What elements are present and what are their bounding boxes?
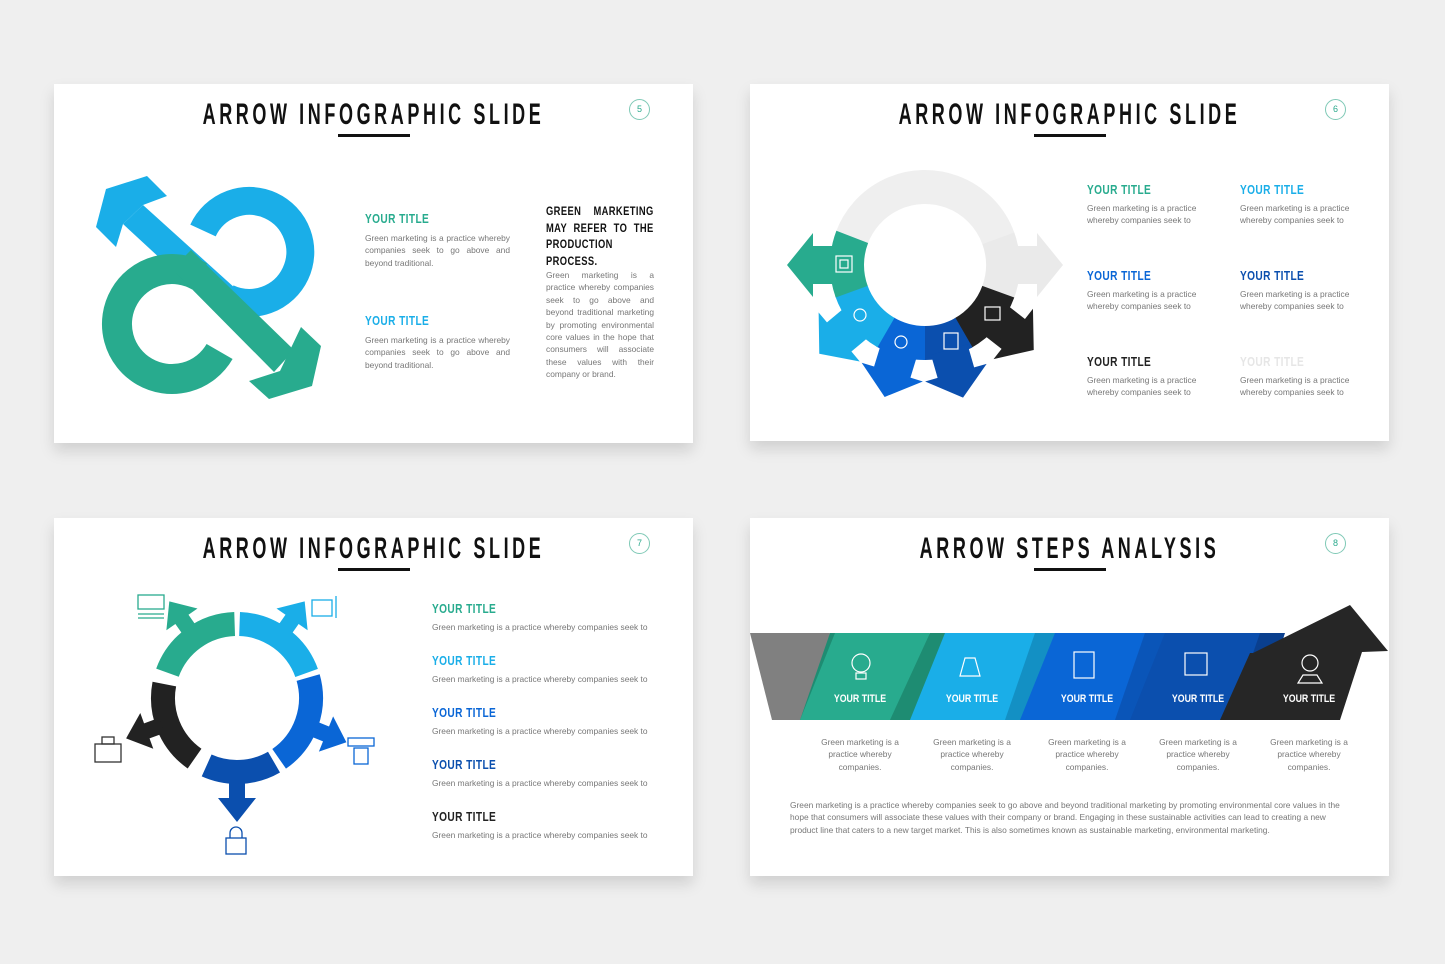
panel: slide 5 (54, 84, 693, 443)
panel: slide 6: Green marketing is a practice (1240, 375, 1349, 385)
text block 3 (546, 204, 654, 379)
chart: steps band: YOUR TITLE (1283, 693, 1335, 705)
page number: 7 (637, 538, 642, 548)
panel: slide 7: Green marketing is a practice whereby companies seek to (432, 622, 648, 632)
panel: slide 6: whereby companies seek to (1087, 387, 1191, 397)
text block 3: Green marketing is a practice whereby companies seek to go above and beyond traditional marketing by promoting environmental core values in the hope that consumers will associate these values with their company or brand. (546, 270, 654, 379)
panel: slide 7 (54, 518, 693, 876)
panel: slide 7: YOUR TITLE (432, 653, 496, 668)
panel: slide 6: whereby companies seek to (1240, 215, 1344, 225)
panel: slide 6: Green marketing is a practice (1087, 203, 1196, 213)
panel: slide 8: Green marketing is a practice whereby companies. (1270, 737, 1348, 772)
text grid: YOUR TITLE (1087, 182, 1151, 197)
title: ARROW INFOGRAPHIC SLIDE (899, 98, 1240, 131)
title: ARROW INFOGRAPHIC SLIDE (203, 98, 544, 131)
page number: 8 (1333, 538, 1338, 548)
text block 1: YOUR TITLE (365, 211, 429, 226)
title: ARROW STEPS ANALYSIS (920, 532, 1219, 565)
panel: slide 6: Green marketing is a practice (1087, 289, 1196, 299)
panel: slide 6 (750, 84, 1389, 441)
panel: slide 6: Green marketing is a practice (1087, 375, 1196, 385)
text list: YOUR TITLE (432, 601, 496, 616)
chart: steps band: YOUR TITLE (1172, 693, 1224, 705)
text block 3: GREEN MARKETING MAY REFER TO THE PRODUCTION PROCESS. (546, 204, 654, 268)
chart: circular 5 arrows (94, 594, 375, 855)
panel: slide 6: Green marketing is a practice (1240, 203, 1349, 213)
icons (95, 595, 374, 854)
panel: slide 6: YOUR TITLE (1240, 354, 1304, 369)
panel: slide 6: YOUR TITLE (1240, 182, 1304, 197)
panel: slide 7: YOUR TITLE (432, 757, 496, 772)
panel: slide 6: YOUR TITLE (1240, 268, 1304, 283)
panel: slide 8: Green marketing is a practice whereby companies. (1048, 737, 1126, 772)
chart: steps band (750, 605, 1388, 720)
panel: slide 6: Green marketing is a practice (1240, 289, 1349, 299)
panel: slide 6: whereby companies seek to (1240, 301, 1344, 311)
page number (1325, 99, 1346, 120)
page number: 6 (1333, 104, 1338, 114)
panel: slide 8: Green marketing is a practice whereby companies. (933, 737, 1011, 772)
panel: slide 6: whereby companies seek to (1240, 387, 1344, 397)
title: ARROW INFOGRAPHIC SLIDE (203, 532, 544, 565)
step descriptions: Green marketing is a practice whereby companies. (821, 737, 899, 772)
panel: slide 7: YOUR TITLE (432, 809, 496, 824)
page number (1325, 533, 1346, 554)
panel: slide 6: YOUR TITLE (1087, 354, 1151, 369)
panel: slide 6: whereby companies seek to (1087, 215, 1191, 225)
chart: steps band: YOUR TITLE (1061, 693, 1113, 705)
chart: infinity arrows (96, 176, 321, 399)
page number (629, 533, 650, 554)
panel: slide 7: Green marketing is a practice whereby companies seek to (432, 726, 648, 736)
panel: slide 6: YOUR TITLE (1087, 268, 1151, 283)
page number: 5 (637, 104, 642, 114)
panel: slide 8: Green marketing is a practice whereby companies. (1159, 737, 1237, 772)
chart: steps band: YOUR TITLE (946, 693, 998, 705)
chart: steps band: YOUR TITLE (834, 693, 886, 705)
panel: slide 6: whereby companies seek to (1087, 301, 1191, 311)
panel: slide 5: Green marketing is a practice whereby companies seek to go above and beyond traditional. (365, 335, 510, 370)
panel: slide 7: Green marketing is a practice whereby companies seek to (432, 830, 648, 840)
page number (629, 99, 650, 120)
panel: slide 7: Green marketing is a practice whereby companies seek to (432, 778, 648, 788)
chart: ring arrows (787, 170, 1063, 398)
panel: slide 8 (750, 518, 1389, 876)
panel: slide 5: Green marketing is a practice whereby companies seek to go above and beyond traditional. (365, 233, 510, 268)
panel: slide 7: Green marketing is a practice whereby companies seek to (432, 674, 648, 684)
panel: slide 7: YOUR TITLE (432, 705, 496, 720)
text block 2: YOUR TITLE (365, 313, 429, 328)
paragraph: Green marketing is a practice whereby companies seek to go above and beyond traditional marketing by promoting environmental core values in the hope that consumers will associate these values with their company or brand. Engaging in these sustainable activities can lead to creating a new product line that caters to a new target market. This is also sometimes known as sustainable marketing, environmental marketing. (790, 800, 1340, 835)
